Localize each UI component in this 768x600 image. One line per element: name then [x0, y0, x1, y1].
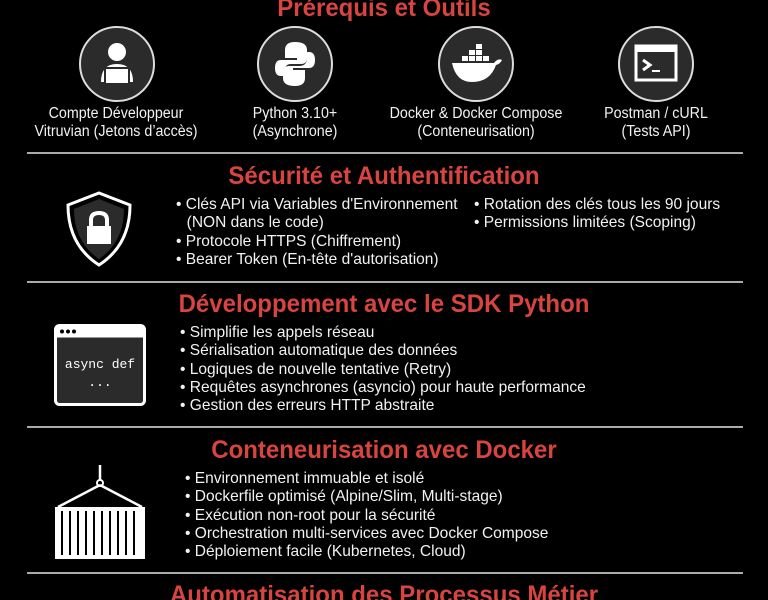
bullets: docker — [186, 470, 548, 560]
heading: securite: Sécurité et Authentification — [228, 162, 540, 190]
bullets: securite left: (NON dans le code) — [187, 214, 324, 231]
bullets: sdk: Simplifie les appels réseau — [190, 324, 374, 341]
bullets: sdk: Logiques de nouvelle tentative (Retry) — [190, 361, 451, 378]
icon: python — [257, 26, 333, 102]
caption: developer: Vitruvian (Jetons d’accès) — [34, 123, 198, 140]
caption: python: (Asynchrone) — [253, 123, 337, 140]
caption: docker — [390, 105, 562, 140]
heading: docker: Conteneurisation avec Docker — [211, 436, 557, 464]
icon: shield — [66, 191, 132, 267]
bullets: docker: Environnement immuable et isolé — [195, 470, 424, 487]
bullets: docker: Exécution non-root pour la sécurité — [195, 507, 435, 524]
bullets: securite left: Bearer Token (En-tête d'autorisation) — [186, 251, 439, 268]
bullets: sdk: Sérialisation automatique des données — [190, 342, 457, 359]
icon: code window — [54, 324, 146, 406]
bullets: docker: Orchestration multi-services avec Docker Compose — [195, 525, 548, 542]
bullets: sdk: Requêtes asynchrones (asyncio) pour haute performance — [190, 379, 586, 396]
caption: postman: Postman / cURL — [604, 105, 708, 122]
icon: code window: ... — [88, 375, 112, 390]
bullets: securite left: Clés API via Variables d'Environnement — [186, 196, 458, 213]
bullets: sdk — [180, 324, 586, 414]
caption: developer: Compte Développeur — [49, 105, 183, 122]
bullets: securite right: Permissions limitées (Scoping) — [484, 214, 696, 231]
caption: docker: Docker & Docker Compose — [390, 105, 562, 122]
icon: code window: async def — [65, 357, 135, 372]
bullets: securite left — [176, 196, 458, 268]
bullets: docker: Dockerfile optimisé (Alpine/Slim, Multi-stage) — [195, 488, 503, 505]
caption: postman: (Tests API) — [622, 123, 690, 140]
icon: developer — [79, 26, 155, 102]
bullets: securite right — [474, 196, 720, 231]
caption: docker: (Conteneurisation) — [417, 123, 535, 140]
icon: container — [55, 465, 145, 559]
caption: developer — [34, 105, 198, 140]
icon: terminal — [618, 26, 694, 102]
bullets: docker: Déploiement facile (Kubernetes, Cloud) — [195, 543, 466, 560]
caption: python: Python 3.10+ — [253, 105, 337, 122]
caption: python — [253, 105, 337, 140]
bullets: securite right: Rotation des clés tous les 90 jours — [484, 196, 720, 213]
heading: sdk: Développement avec le SDK Python — [179, 290, 589, 318]
caption: postman — [604, 105, 708, 140]
bullets: securite left: Protocole HTTPS (Chiffrement) — [186, 233, 401, 250]
bullets: sdk: Gestion des erreurs HTTP abstraite — [190, 397, 434, 414]
icon: docker — [438, 26, 514, 102]
